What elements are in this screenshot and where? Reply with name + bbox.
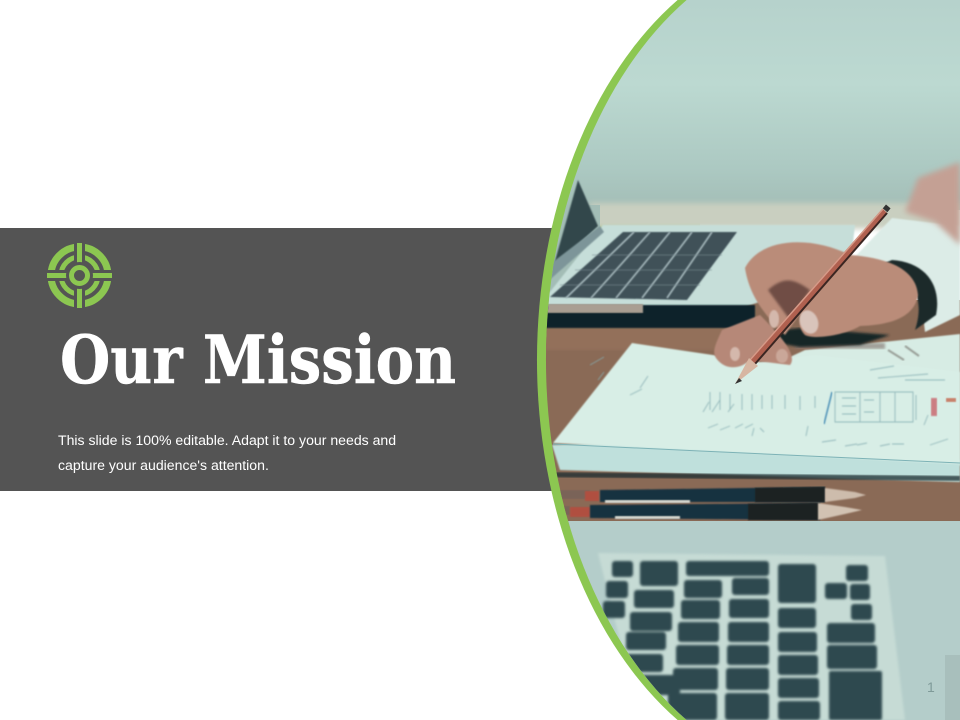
text block: description: capture your audience's attention.: [58, 457, 269, 473]
page number: 1: [927, 679, 935, 695]
photo: desk with laptop, hand and papers in green-rimmed ellipse: [537, 0, 960, 720]
icon: target crosshair: [47, 243, 112, 308]
title: Our Mission: [60, 321, 456, 399]
panel: dark title band: [0, 228, 580, 491]
text block: description: [58, 432, 396, 473]
text block: description: This slide is 100% editable. Adapt it to your needs and: [58, 432, 396, 448]
